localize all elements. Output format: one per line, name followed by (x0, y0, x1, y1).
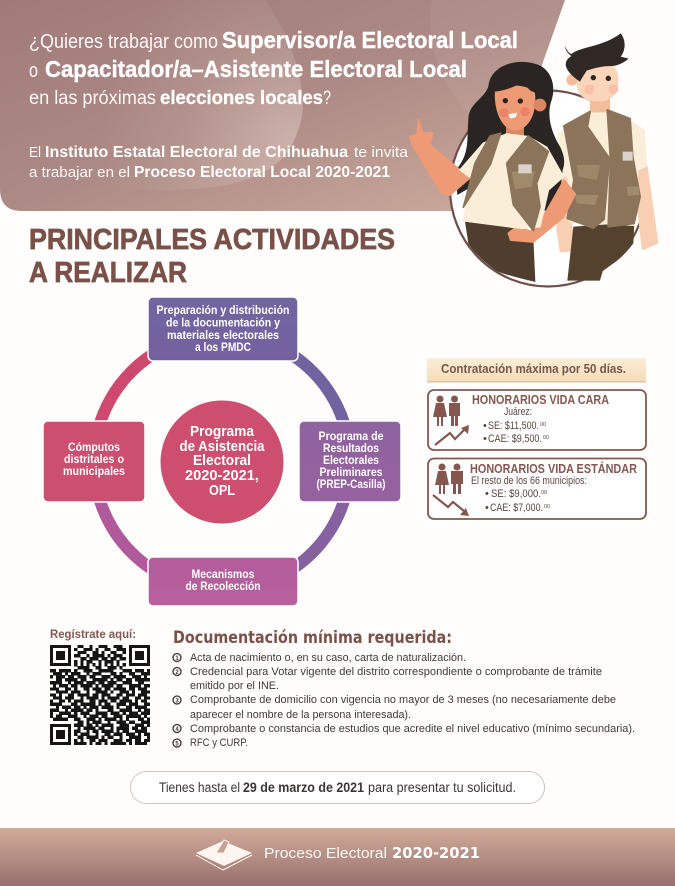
center circle (160, 400, 284, 524)
box: mecanismos: Mecanismos (192, 569, 254, 581)
item 5 (173, 737, 248, 749)
headline question: ¿Quieres trabajar como (29, 31, 218, 53)
panel: honorarios vida estándar: 00 (544, 504, 550, 510)
box: mecanismos (148, 557, 298, 606)
deadline pill: 29 de marzo de 2021 (243, 780, 364, 795)
registration label: Regístrate aquí: (50, 629, 136, 641)
box: preparación: Preparación y distribución (156, 305, 290, 317)
item 5: RFC y CURP. (190, 737, 248, 749)
panel: honorarios vida estándar: • (485, 488, 489, 500)
deadline pill: para presentar tu solicitud. (368, 780, 516, 795)
box: preparación: a los PMDC (195, 342, 251, 354)
item 1: Acta de nacimiento o, en su caso, carta de naturalización. (190, 652, 466, 664)
box: preparación: de la documentación y (166, 318, 281, 330)
headline question: ? (323, 88, 331, 109)
contract duration banner: Contratación máxima por 50 días. (441, 362, 626, 376)
invitation text (29, 144, 409, 181)
item 3 (173, 694, 616, 721)
invitation text: a trabajar en el (29, 164, 130, 181)
contract duration banner (427, 358, 646, 382)
documentation list (173, 652, 635, 749)
footer text: Proceso Electoral (264, 845, 387, 862)
item 2: 2 (175, 670, 179, 676)
illustration: two electoral workers in circle (410, 33, 657, 287)
invitation text: Proceso Electoral Local 2020-2021 (134, 164, 390, 181)
invitation text: El (29, 144, 41, 161)
panel: honorarios vida estándar (428, 458, 646, 519)
panel: honorarios vida cara: CAE: $9,500. (488, 433, 542, 445)
QR code (50, 645, 150, 745)
section heading: PRINCIPALES ACTIVIDADES (29, 224, 395, 256)
box: PREP (299, 421, 401, 502)
deadline pill: Tienes hasta el (159, 780, 240, 795)
invitation text: Instituto Estatal Electoral de Chihuahua (45, 144, 348, 161)
panel: honorarios vida cara: • (483, 433, 487, 445)
box: cómputos: municipales (63, 466, 125, 478)
headline question: elecciones locales (160, 88, 323, 109)
panel: honorarios vida cara: Juárez: (504, 406, 532, 418)
panel: honorarios vida estándar: 00 (541, 490, 547, 496)
item 3: aparecer el nombre de la persona interesada). (190, 709, 411, 721)
section heading (29, 224, 395, 289)
ring arcs (94, 334, 350, 590)
panel: honorarios vida cara: • (483, 420, 487, 432)
box: cómputos (43, 421, 145, 502)
panel: honorarios vida estándar: El resto de los 66 municipios: (471, 475, 587, 487)
item 2 (173, 666, 602, 692)
icon: people and rising arrow (433, 396, 469, 445)
center circle: Programa (190, 423, 255, 440)
headline question: Capacitador/a–Asistente Electoral Local (45, 56, 467, 82)
headline question: o (29, 60, 38, 82)
headline question (29, 27, 518, 109)
box: mecanismos: de Recolección (186, 581, 260, 593)
panel: honorarios vida estándar: SE: $9,000. (491, 488, 541, 500)
item 2: emitido por el INE. (190, 680, 279, 692)
box: cómputos: Cómputos (68, 442, 120, 454)
woman figure (410, 62, 575, 282)
documentation heading: Documentación mínima requerida: (173, 628, 452, 648)
box: PREP: Electorales (323, 455, 379, 467)
panel: honorarios vida cara: 00 (543, 435, 549, 441)
section heading: A REALIZAR (29, 257, 187, 289)
item 3: 3 (175, 698, 179, 704)
panel: honorarios vida estándar: HONORARIOS VIDA ESTÁNDAR (470, 461, 637, 476)
icon: ballot box (196, 840, 252, 870)
center circle: Electoral (193, 452, 251, 469)
panel: honorarios vida cara (428, 390, 646, 450)
item 4: 4 (175, 727, 179, 733)
item 5: 5 (175, 742, 179, 748)
footer text: 2020-2021 (392, 844, 480, 862)
footer text (264, 844, 480, 862)
panel: honorarios vida cara: SE: $11,500. (488, 420, 539, 432)
box: PREP: Resultados (323, 443, 379, 455)
center circle: de Asistencia (180, 438, 265, 455)
panel: honorarios vida cara: 00 (540, 422, 546, 428)
item 3: Comprobante de domicilio con vigencia no mayor de 3 meses (no necesariamente debe (190, 694, 616, 706)
panel: honorarios vida estándar: • (485, 502, 489, 514)
panel: honorarios vida estándar: CAE: $7,000. (490, 502, 543, 514)
headline question: Supervisor/a Electoral Local (222, 27, 518, 53)
box: PREP: (PREP-Casilla) (316, 479, 386, 491)
item 4: Comprobante o constancia de estudios que acredite el nivel educativo (mínimo secundaria). (190, 723, 635, 735)
item 1: 1 (175, 656, 179, 662)
deadline pill (130, 772, 544, 804)
box: preparación (148, 297, 298, 361)
item 2: Credencial para Votar vigente del distrito correspondiente o comprobante de trámite (190, 666, 602, 678)
center circle: OPL (209, 482, 235, 499)
box: cómputos: distritales o (64, 454, 124, 466)
box: PREP: Programa de (318, 431, 384, 443)
box: PREP: Preliminares (320, 467, 382, 479)
headline question: en las próximas (29, 88, 156, 109)
cycle diagram (43, 297, 401, 606)
footer band (0, 828, 675, 886)
man figure (557, 33, 657, 281)
invitation text: te invita (354, 144, 409, 161)
header panel (0, 0, 565, 211)
icon: people and falling arrow (433, 464, 469, 516)
center circle: 2020-2021, (185, 467, 259, 484)
box: preparación: materiales electorales (167, 330, 279, 342)
panel: honorarios vida cara: HONORARIOS VIDA CARA (472, 393, 609, 407)
